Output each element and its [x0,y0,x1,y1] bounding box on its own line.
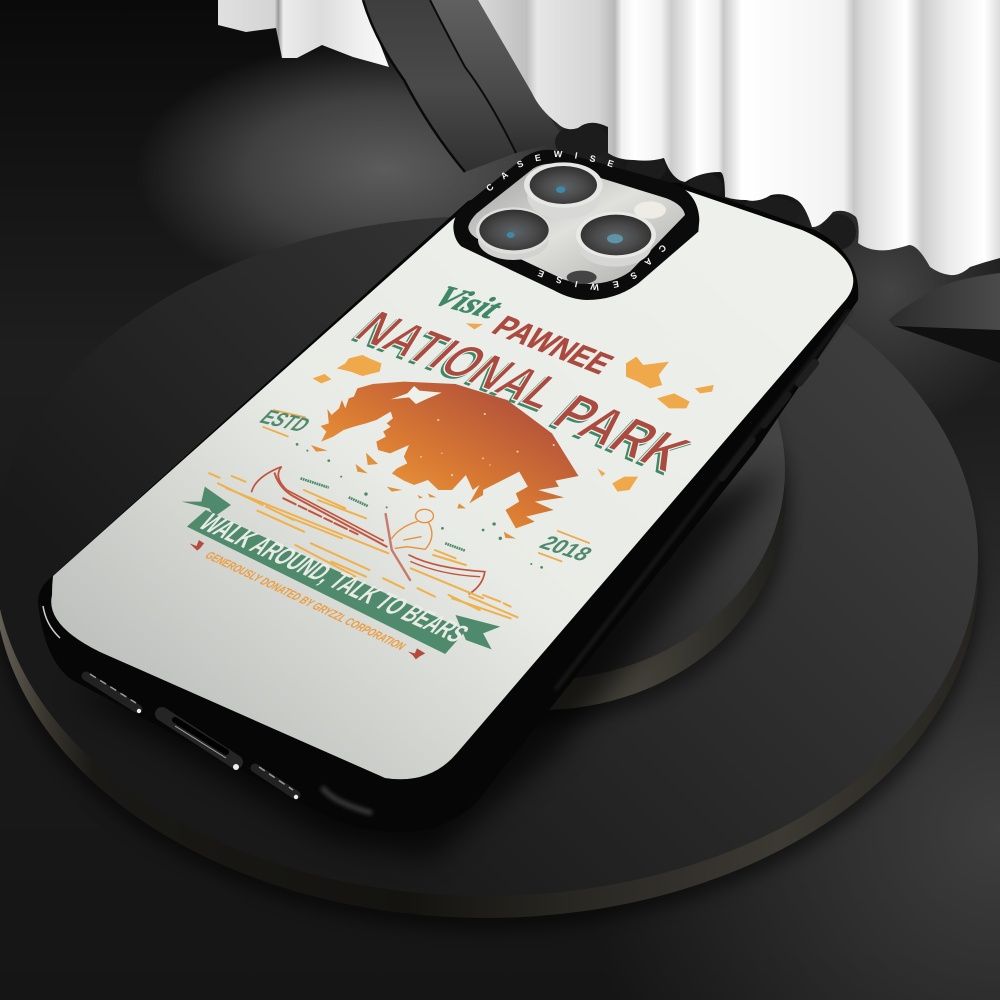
canoe [252,467,485,594]
curtain right [478,0,1000,275]
right lens [576,212,656,267]
title: Visit: Visit [426,280,511,325]
left lens [476,207,551,260]
bottom ports [86,674,298,799]
top lens [524,162,603,219]
flash [634,201,666,219]
year label: 2018 [534,532,597,566]
paddle [386,514,410,580]
stars [420,413,555,476]
title: NATIONAL: NATIONAL [340,303,574,420]
donor line: GENEROUSLY DONATED BY GRYZZL CORPORATION [202,549,409,652]
curtain left [218,0,389,67]
case gloss highlights [322,310,850,813]
lens window [468,164,685,284]
specks [296,443,543,569]
artwork: illustration [182,323,714,659]
corner gloss [43,606,60,638]
banner slogan: WALK AROUND, TALK TO BEARS [192,509,476,648]
phone shadow [70,470,780,860]
phone back panel [51,190,853,779]
established label: ESTD [254,406,316,436]
phone case body [38,175,858,832]
banner with tails [182,487,500,654]
brand text top: CASEWISE [486,150,614,191]
brand text bottom: CASEWISE [538,245,666,291]
title: PARK: PARK [540,384,704,482]
curtain base shadows [555,124,856,250]
leaves [313,323,714,492]
microphone sensor [567,271,597,284]
bird [391,386,442,404]
platform: small disc [295,260,785,710]
title: PARK: PARK [537,386,701,484]
bushes [301,478,465,551]
dark wedge stand [889,273,1000,363]
side buttons [722,363,815,478]
red maple stars [190,540,425,659]
title: PAWNEE: PAWNEE [484,310,620,380]
camera island [453,150,700,300]
tree spikes [311,445,516,539]
title: NATIONAL: NATIONAL [343,301,577,418]
title: NATIONAL [340,301,577,420]
arch stand [363,0,565,172]
small disc shadow [290,287,790,723]
shadow under platform [0,246,980,930]
estd / year rules [263,410,590,562]
paddler [392,509,433,549]
platform: large disc [0,216,978,918]
sun with tree silhouettes [321,382,578,528]
water lines [209,473,518,618]
